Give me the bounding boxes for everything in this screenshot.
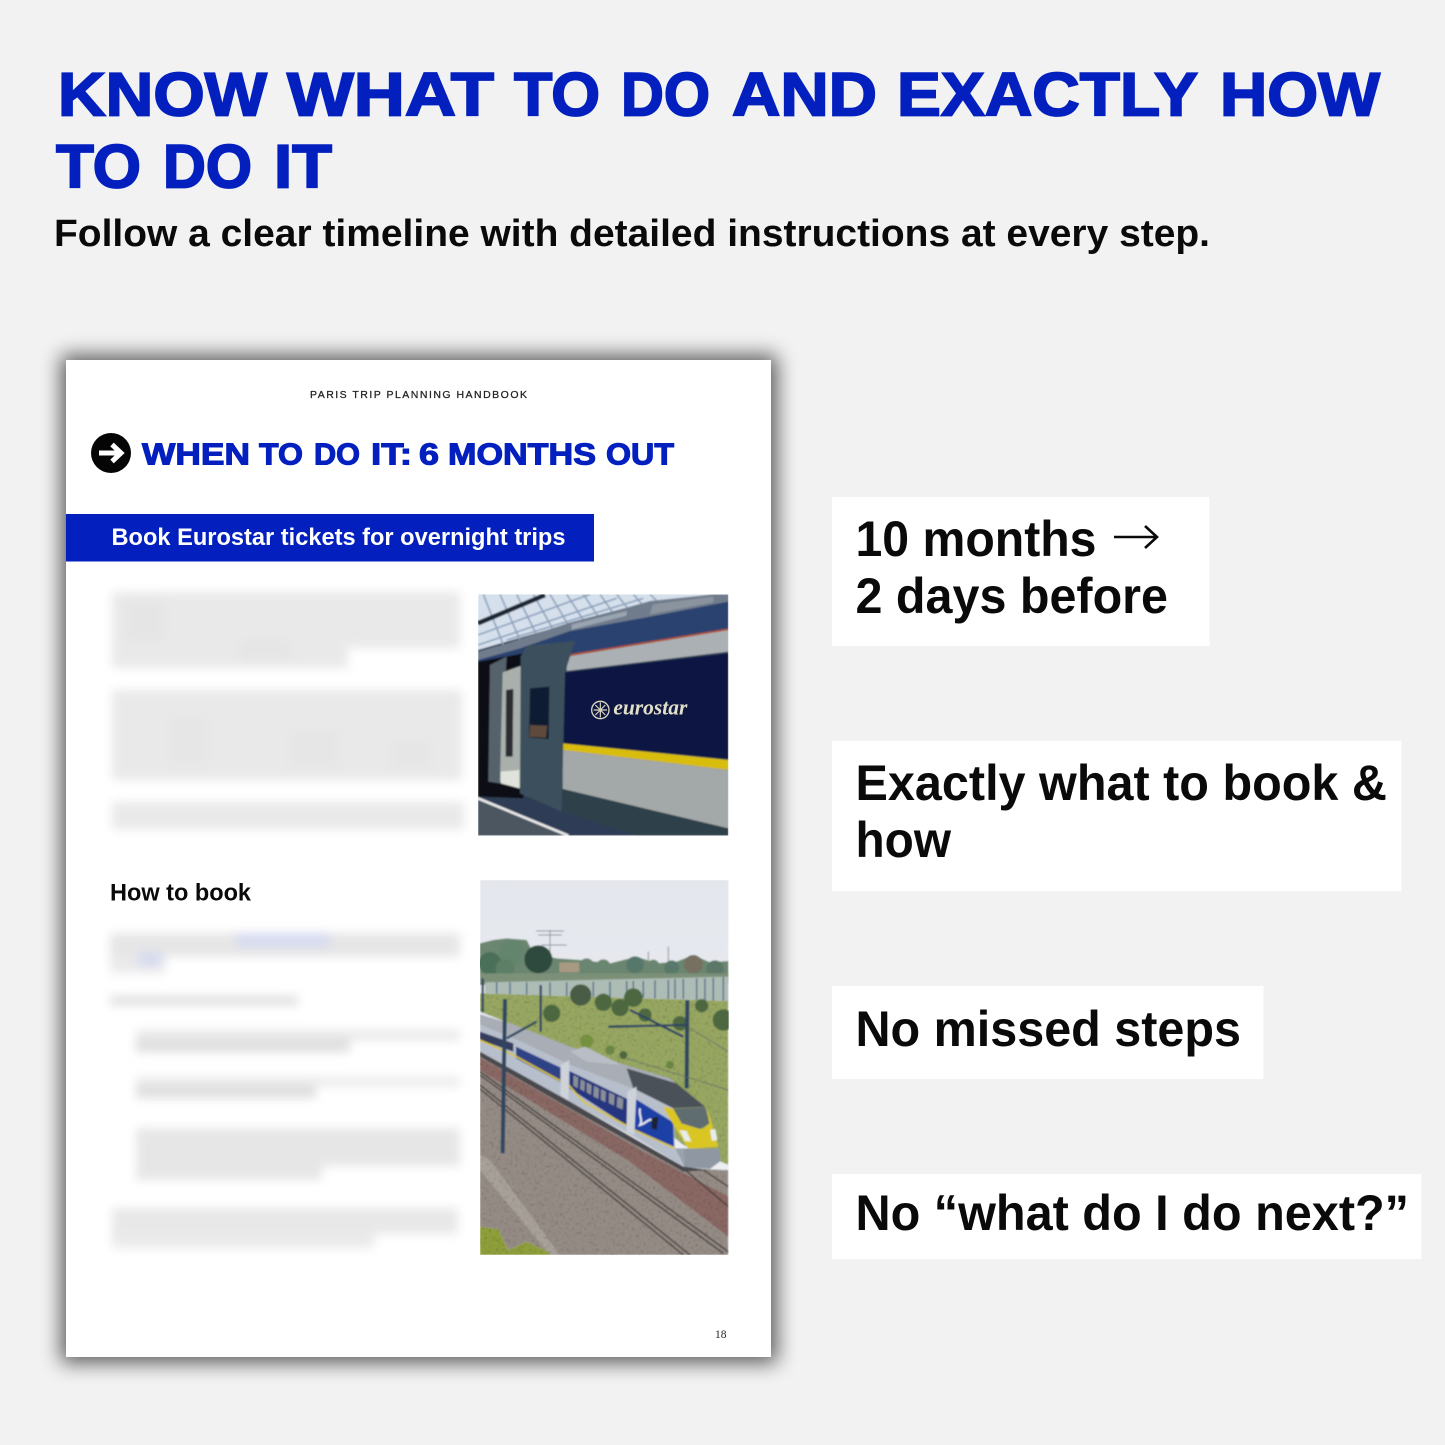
title: IT: [274, 132, 332, 200]
page heading: 6: [419, 436, 439, 472]
poles: [503, 999, 687, 1153]
title: [56, 60, 1380, 200]
callout: no missed steps: No missed steps: [856, 1001, 1241, 1057]
title: KNOW: [58, 60, 267, 128]
title: TO: [514, 60, 600, 128]
callout: timing: [832, 497, 1210, 646]
train roof: [478, 602, 728, 662]
page heading: DO: [314, 436, 360, 472]
page heading: IT:: [371, 436, 412, 472]
section banner: [66, 514, 594, 562]
tree line: [479, 938, 728, 985]
page number: 18: [715, 1329, 727, 1341]
callout: what next: No “what do I do next?”: [856, 1185, 1409, 1241]
ballast: [480, 1055, 728, 1255]
title: DO: [621, 60, 710, 128]
train: [480, 1014, 703, 1108]
callout: what to book: how: [856, 812, 951, 868]
callout: what to book: Exactly what to book &: [856, 755, 1387, 811]
page heading: WHEN: [142, 436, 250, 472]
rails: [480, 1072, 728, 1255]
title: EXACTLY: [897, 60, 1198, 128]
section banner: Book Eurostar tickets for overnight trips: [112, 524, 566, 551]
title: DO: [163, 132, 252, 200]
blurred text block: how to book: [110, 933, 460, 1248]
page heading: TO: [259, 436, 303, 472]
title: AND: [732, 60, 877, 128]
page heading: MONTHS: [448, 436, 596, 472]
photo: eurostar train at platform: eurostar: [613, 695, 688, 720]
page heading: OUT: [606, 436, 674, 472]
title: WHAT: [287, 60, 494, 128]
photo: high speed train on tracks: [479, 880, 734, 1255]
page shadow: [61, 355, 777, 1363]
panel: handbook page: [66, 360, 771, 1357]
station roof: [478, 594, 728, 650]
icon: eurostar logo: [592, 701, 609, 719]
callout: what to book: [832, 741, 1402, 891]
callout: timing: 10 months: [856, 511, 1096, 567]
photo: eurostar train at platform: [478, 594, 728, 836]
page header: PARIS TRIP PLANNING HANDBOOK: [310, 389, 527, 401]
callout: what next: [832, 1174, 1422, 1259]
title: TO: [56, 132, 141, 200]
subtitle: Follow a clear timeline with detailed instructions at every step.: [54, 213, 1210, 255]
blurred text block: intro: [112, 592, 464, 829]
subheading: How to book: [110, 880, 252, 906]
icon: arrow in circle: [91, 433, 131, 473]
title: HOW: [1220, 60, 1380, 128]
callout: timing: 2 days before: [856, 568, 1168, 624]
page heading: [142, 436, 674, 472]
callout: no missed steps: [832, 986, 1264, 1079]
icon: thin arrow: [1114, 526, 1157, 548]
hillside: [480, 993, 728, 1165]
